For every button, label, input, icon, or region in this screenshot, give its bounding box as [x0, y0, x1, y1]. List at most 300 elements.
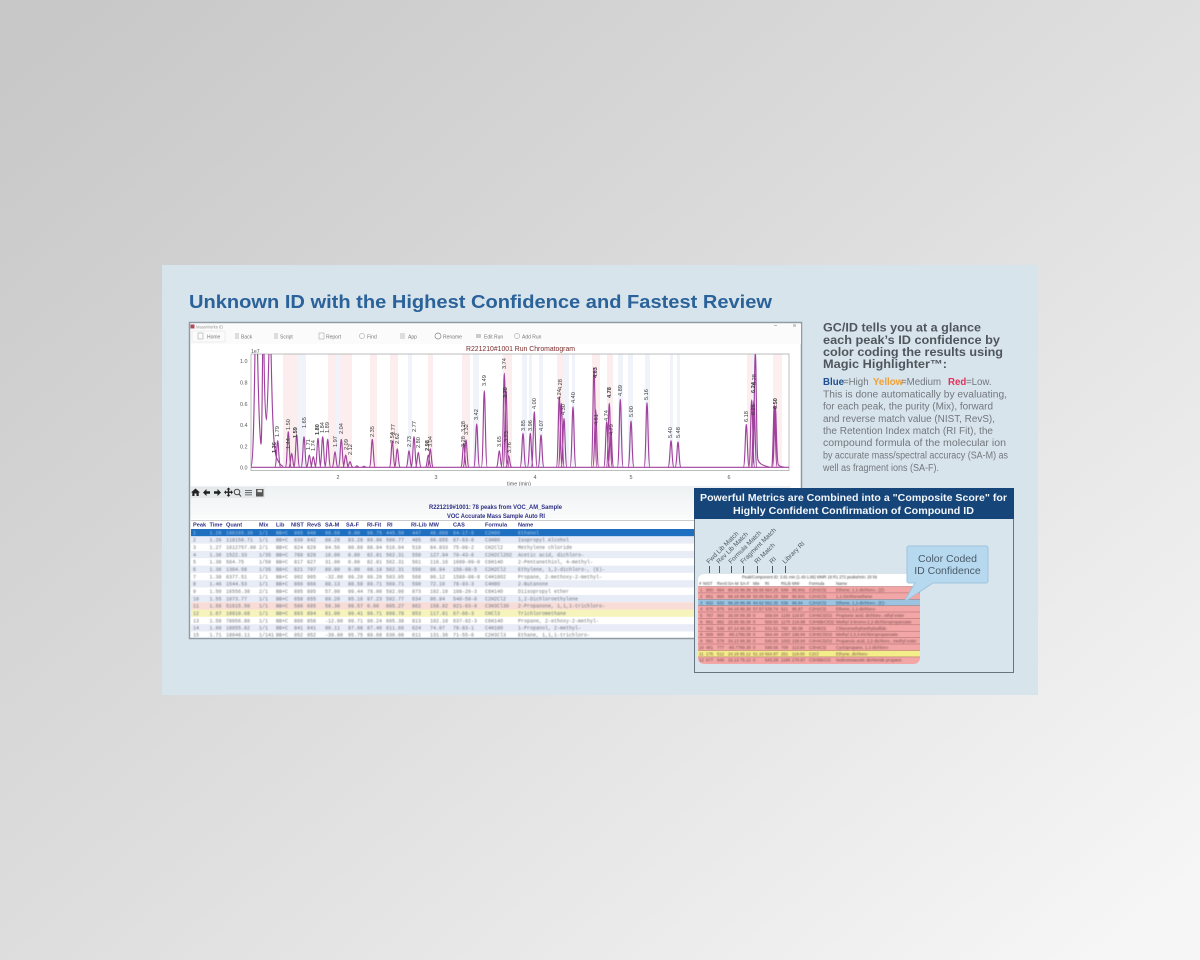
table rows: 921-03-9: [453, 604, 477, 610]
table rows: BB+C: [276, 626, 288, 632]
peak labels: 4.74: [604, 410, 610, 421]
mini results table: 1097: [781, 632, 791, 637]
mini results table: 549: [781, 588, 789, 592]
mini results table: 531.51: [765, 626, 779, 631]
mini results table: 932: [706, 600, 714, 605]
mini results table: 119.97: [792, 613, 805, 618]
mini results table: 34.13: [728, 639, 739, 644]
table rows: 13: [193, 618, 199, 624]
table rows: 592.77: [386, 596, 404, 602]
mini results table: 0: [753, 658, 756, 662]
table rows: 51615.50: [226, 604, 250, 610]
mini results table: 170.97: [792, 658, 806, 662]
mini results table: Ethene, 1,2-dichloro-, (E)-: [836, 600, 886, 605]
table rows: Diisopropyl ether: [518, 589, 569, 595]
table rows: 605.27: [386, 604, 404, 610]
software toolbar: MassWorks ID: [196, 324, 223, 330]
peak labels: 5.16: [644, 389, 650, 400]
mini results table: 777: [717, 645, 725, 650]
metric labels: Fragment Match: [739, 527, 778, 565]
mini results table: 540.00: [765, 639, 779, 644]
table rows: C2H3Cl3: [485, 632, 506, 638]
peak labels: 4.24: [557, 389, 563, 400]
table rows: 1073.77: [226, 596, 247, 602]
table rows: BB+C: [276, 618, 288, 624]
table rows: C4H10O2: [485, 574, 506, 580]
table rows: 590: [412, 582, 421, 588]
table rows: 1-Propanol, 2-methyl-: [518, 626, 581, 632]
table rows: 1.26: [210, 530, 222, 536]
x axis labels: time (min): [507, 482, 531, 488]
table rows: 1.50: [210, 589, 222, 595]
popup header: Highly Confident Confirmation of Compound ID: [733, 505, 974, 517]
table rows: 1/141: [259, 632, 274, 638]
table rows: 839: [294, 538, 303, 544]
table rows: 87.23: [367, 596, 382, 602]
mini results table: 99.18: [728, 594, 739, 599]
side body copy: compound formula of the molecular ion: [823, 438, 1006, 449]
mini results table: 851: [706, 594, 714, 599]
mini results table: 875: [717, 607, 725, 612]
table rows: 18055.82: [226, 626, 250, 632]
table header: Formula: [485, 522, 508, 528]
mini results table: Peak/Component ID: 3.81 min (1.40-1.86) MMR 18 R1 272 peaks/min: 20 hit: [742, 574, 878, 580]
mini results table: C4H6Cl2O2: [809, 613, 833, 618]
table rows: 31.00: [325, 560, 340, 566]
peak labels: 1.97: [333, 436, 339, 447]
table rows: 90.60: [348, 545, 363, 551]
table rows: 96.94: [430, 596, 445, 602]
side heading: color coding the results using: [823, 347, 1003, 359]
peak labels: 2.62: [395, 433, 401, 444]
mini results table: C3H5BrCl2: [809, 658, 831, 662]
peak labels: 4.61: [594, 414, 600, 425]
table rows: 1/35: [259, 552, 271, 558]
mini results table: 175: [706, 652, 714, 656]
mini results table: 569.04: [765, 613, 779, 618]
peak labels: 6.18: [744, 411, 750, 422]
mini results table: 97.14: [728, 626, 739, 631]
table header: CAS: [453, 522, 465, 528]
peak labels: 1.36: [272, 442, 278, 453]
mini results table: C5H8OS: [809, 626, 826, 631]
table rows: 68.19: [367, 567, 382, 573]
table rows: 89.20: [325, 596, 340, 602]
mini results table: 94.62: [753, 600, 764, 605]
table rows: 905: [307, 574, 316, 580]
table rows: 102.10: [430, 618, 448, 624]
x axis labels: 2: [336, 475, 340, 481]
table rows: 634: [412, 596, 421, 602]
mini results table: C2H2Cl2: [809, 600, 827, 605]
table header: SA-F: [346, 522, 360, 528]
mini results table: C2H2Cl2: [809, 607, 827, 612]
peak labels: 3.42: [474, 409, 480, 420]
mini results table: 85.08: [792, 626, 803, 631]
table rows: 2/1: [259, 589, 268, 595]
table rows: C4H8O: [485, 582, 500, 588]
table heading: [429, 504, 562, 520]
mini results table: 113.94: [792, 645, 805, 650]
table rows: 894: [307, 611, 316, 617]
table rows: 1/1: [259, 574, 268, 580]
table rows: 82.81: [367, 552, 382, 558]
table rows: 1304.58: [226, 567, 247, 573]
table rows: 99.71: [367, 611, 382, 617]
mini results table: C2Cl: [809, 652, 819, 656]
table rows: 89.68: [367, 632, 382, 638]
table rows: 893: [294, 611, 303, 617]
peak labels: 3.73: [504, 431, 510, 442]
table rows: 995: [294, 530, 303, 536]
table rows: 5: [193, 560, 196, 566]
mini results table: -85.77: [728, 645, 741, 650]
software toolbar: Find: [367, 334, 377, 340]
chart title: R221210#1001 Run Chromatogram: [466, 344, 575, 353]
table rows: 10: [193, 596, 199, 602]
table rows: -32.00: [325, 574, 343, 580]
mini results table: NIST: [703, 581, 713, 586]
peak labels: 2.98: [425, 440, 431, 451]
table rows: 1522.33: [226, 552, 247, 558]
peak labels: 6.26: [751, 404, 757, 415]
mini results table: 543.28: [765, 658, 779, 662]
peak labels: 1.74: [311, 440, 317, 451]
table rows: 88.13: [325, 582, 340, 588]
mini results table: 860: [706, 588, 714, 592]
chromatogram trace: [251, 350, 789, 467]
table rows: 500.77: [386, 538, 404, 544]
table rows: 1.46: [210, 582, 222, 588]
mini results table: 1002: [781, 639, 791, 644]
mini results table: 99.38: [740, 639, 751, 644]
table rows: C2H2Cl2: [485, 596, 506, 602]
mini results table: 1,1-Dichloroethene: [836, 594, 873, 599]
mini results table: 0: [753, 632, 756, 637]
table rows: 1.39: [210, 574, 222, 580]
mini results table: 119.00: [792, 652, 805, 656]
peak labels: 6.24: [751, 381, 757, 393]
peak labels: 1.50: [286, 419, 292, 430]
peak labels: 4.63: [593, 367, 599, 378]
mini results table: 96.941: [792, 594, 806, 599]
software toolbar: Rename: [443, 334, 462, 340]
popup header: Powerful Metrics are Combined into a "Composite Score" for: [700, 492, 1007, 504]
table rows: 2-Propanone, 1,1,1-trichloro-: [518, 604, 605, 610]
peak labels: 4.28: [558, 379, 564, 390]
mini results table: 99.38: [740, 588, 751, 592]
mini results table: #: [699, 581, 702, 586]
mini results table: 9: [700, 639, 703, 644]
table rows: 695: [307, 604, 316, 610]
side heading: [823, 322, 1003, 371]
mini results table: 8: [700, 632, 703, 637]
table rows: 789: [294, 552, 303, 558]
table rows: 866: [307, 582, 316, 588]
x axis labels: 3: [434, 475, 438, 481]
table rows: Isopropyl Alcohol: [518, 538, 569, 544]
table rows: 2: [193, 538, 196, 544]
mini results table: Chloromethylmethylsulfide: [836, 626, 887, 631]
table rows: 18048.11: [226, 632, 250, 638]
table header: Lib: [276, 522, 285, 528]
mini results table: 1190: [781, 613, 791, 618]
peak labels: 2.77: [412, 421, 418, 432]
table rows: 862: [412, 604, 421, 610]
table rows: BB+C: [276, 589, 288, 595]
mini results table: 99.38: [740, 619, 751, 624]
mini results table: Methyl 2,3,3-trichloropropanoate: [836, 632, 898, 637]
table rows: 485: [412, 538, 421, 544]
table rows: 445.50: [386, 530, 404, 536]
peak labels: 1.44: [286, 438, 292, 449]
table rows: 895: [307, 589, 316, 595]
mini results table: 56.66: [753, 588, 764, 592]
peak labels: 1.59: [293, 427, 299, 438]
mini results table: C3H5Cl3O2: [809, 632, 833, 637]
table rows: 16556.38: [226, 589, 250, 595]
mini results table: 564.44: [765, 632, 779, 637]
table rows: 564.75: [226, 560, 244, 566]
table rows: 99.44: [348, 589, 363, 595]
mini results table: C3H4Cl2: [809, 645, 827, 650]
software toolbar: Home: [207, 334, 221, 340]
peak labels: 5.00: [629, 406, 635, 417]
table rows: BB+C: [276, 611, 288, 617]
table rows: 87.46: [367, 626, 382, 632]
table rows: 96.94: [430, 567, 445, 573]
mini results table: 536: [781, 600, 789, 605]
peak labels: 1.84: [320, 422, 326, 433]
table rows: BB+C: [276, 632, 288, 638]
table rows: 64-17-5: [453, 530, 474, 536]
peak results table: [191, 520, 694, 638]
peak labels: 3.96: [528, 420, 534, 431]
table rows: 82.81: [367, 560, 382, 566]
peak labels: 3.74: [502, 358, 508, 369]
table rows: 858: [307, 618, 316, 624]
software toolbar: Report: [326, 334, 342, 340]
mini results table: 219.88: [792, 619, 806, 624]
table rows: [193, 530, 605, 638]
table rows: 87.08: [348, 626, 363, 632]
table rows: 1: [193, 530, 196, 536]
table heading: R221219#1001: 78 peaks from VOC_AM_Sample: [429, 504, 562, 511]
peak labels: 3.04: [428, 436, 434, 447]
table rows: BB+C: [276, 545, 288, 551]
table rows: 1/50: [259, 560, 271, 566]
peak labels: 4.07: [539, 420, 545, 431]
peak labels: 3.28: [461, 421, 467, 432]
table rows: 0.00: [348, 552, 360, 558]
table rows: 18910.68: [226, 611, 250, 617]
peak labels: 2.35: [370, 426, 376, 437]
table rows: 8: [193, 582, 196, 588]
table rows: 797: [307, 567, 316, 573]
table rows: 95.16: [348, 596, 363, 602]
table rows: BB+C: [276, 538, 288, 544]
table rows: 1589-08-8: [453, 574, 480, 580]
software toolbar: [190, 324, 801, 344]
mini results table: 539.74: [765, 607, 779, 612]
table rows: 89.71: [367, 582, 382, 588]
table header: RI-Lib: [411, 522, 427, 528]
mini results table: 564.25: [765, 588, 779, 592]
mini results table: 709: [781, 645, 789, 650]
metric labels: Rev Lib Match: [715, 531, 750, 565]
mini results table: 861: [706, 619, 714, 624]
mini results table: 99.28: [728, 600, 739, 605]
side heading: GC/ID tells you at a glance: [823, 322, 981, 334]
table rows: 131.30: [430, 632, 448, 638]
mini results table: -86.17: [728, 632, 741, 637]
y axis labels: 0.4: [240, 423, 248, 429]
mini results table: 26.00: [728, 613, 739, 618]
table rows: 6: [193, 567, 196, 573]
table rows: 952: [294, 632, 303, 638]
mini results table: 15.13: [728, 658, 739, 662]
table rows: BB+C: [276, 574, 288, 580]
mini results table: 99.38: [740, 632, 751, 637]
mini results table: 0: [753, 645, 756, 650]
table rows: 127.94: [430, 552, 448, 558]
table rows: 88.28: [325, 538, 340, 544]
mini results table: 261: [781, 652, 789, 656]
table rows: 550: [412, 552, 421, 558]
mini results table: 94.18: [728, 607, 739, 612]
mini results table: 85.12: [740, 652, 751, 656]
mini results table: Propanoic acid, 2,2-dichloro-, methyl ester: [836, 639, 917, 644]
table rows: 895: [294, 589, 303, 595]
mini results table: RILib: [781, 581, 791, 586]
table rows: 550: [412, 567, 421, 573]
table rows: CHCl3: [485, 611, 500, 617]
table rows: 158.92: [430, 604, 448, 610]
side body copy: and reverse match value (NIST, RevS),: [823, 414, 995, 425]
mini results table: Cyclopropane, 1,1-dichloro-: [836, 645, 889, 650]
peak labels: 1.89: [325, 422, 331, 433]
panel: composite score popup: [694, 488, 1014, 672]
table rows: 12: [193, 611, 199, 617]
side body copy: Red: [948, 377, 966, 388]
mini results table: 599.56: [765, 645, 779, 650]
mini results table: 0: [753, 619, 756, 624]
metric labels: Fwd Lib Match: [705, 530, 741, 565]
mini results table: 584: [781, 594, 789, 599]
peak labels: 3.76: [507, 442, 513, 453]
table rows: 609.78: [386, 611, 404, 617]
mini results table: C2H2Cl2: [809, 594, 827, 599]
side body copy: This is done automatically by evaluating,: [823, 390, 1007, 400]
table rows: 67-66-3: [453, 611, 474, 617]
mini results table: 25.95: [728, 619, 739, 624]
table rows: 1.36: [210, 567, 222, 573]
table rows: 1,2-Dichloroethylene: [518, 596, 578, 602]
table rows: 4: [193, 552, 196, 558]
peak labels: 4.79: [609, 424, 615, 435]
mini results table: 882: [717, 619, 725, 624]
table rows: C4H10O: [485, 626, 503, 632]
table header: Quant: [226, 522, 242, 528]
callout: color coded ID confidence: ID Confidence: [914, 565, 981, 577]
table rows: 562.31: [386, 560, 404, 566]
table rows: 2/1: [259, 545, 268, 551]
table header: MW: [429, 522, 440, 528]
metric labels: Formula Match: [727, 530, 763, 565]
mini results table: Propionic acid, dichloro-, ethyl ester: [836, 613, 905, 618]
mini results table: 750: [781, 626, 789, 631]
metric labels: Library RI: [781, 540, 806, 565]
table rows: 89.90: [367, 538, 382, 544]
table rows: 90.11: [325, 626, 340, 632]
mini results table: 99.38: [740, 626, 751, 631]
table header: NIST: [291, 522, 304, 528]
mini results table: 188.84: [792, 632, 806, 637]
mini results table: 512: [717, 652, 725, 656]
table rows: CH2Cl2: [485, 545, 503, 551]
mini results table: Mix: [753, 581, 760, 586]
peak labels: 1.65: [302, 417, 308, 428]
software toolbar: Add Run: [522, 334, 542, 340]
mini results table: 3: [700, 600, 703, 605]
peak labels: 1.79: [275, 426, 281, 437]
table rows: BB+C: [276, 604, 288, 610]
peak labels: 4.89: [618, 385, 624, 396]
y axis labels: 1.0: [240, 359, 248, 365]
mini results table: RI: [765, 581, 769, 586]
table rows: 0.00: [367, 604, 379, 610]
side text: description: [822, 322, 1008, 474]
mini results table: 51.10: [753, 652, 764, 656]
table rows: 873: [412, 589, 421, 595]
side body copy: =High: [843, 377, 869, 388]
table rows: BB+C: [276, 596, 288, 602]
mini results table: 89.38: [740, 607, 751, 612]
mini results table: 89.38: [740, 645, 751, 650]
mini results table: 50.00: [753, 594, 764, 599]
table rows: 78-83-1: [453, 626, 474, 632]
mini results table: 6: [700, 619, 703, 624]
table rows: 813: [412, 618, 421, 624]
table rows: 78-93-3: [453, 582, 474, 588]
mini results table: 662: [706, 626, 714, 631]
table rows: BB+C: [276, 560, 288, 566]
table rows: 94.56: [325, 545, 340, 551]
peak labels: 4.30: [561, 404, 567, 415]
mini results table: 548: [717, 626, 725, 631]
y axis labels: 1e7: [251, 349, 260, 355]
y axis labels: 0.0: [240, 466, 248, 472]
table rows: 853: [412, 611, 421, 617]
table rows: 74.07: [430, 626, 445, 632]
side body copy: Blue: [823, 377, 845, 388]
table rows: 16.00: [325, 552, 340, 558]
table rows: 569.71: [386, 582, 404, 588]
side body copy: for each peak, the purity (Mix), forward: [823, 402, 993, 412]
table rows: 57.00: [325, 589, 340, 595]
mini results table: 95.87: [792, 607, 803, 612]
table rows: 102.10: [430, 589, 448, 595]
peak labels: 1.71: [306, 439, 312, 450]
table rows: 14: [193, 626, 199, 632]
table rows: 561: [412, 560, 421, 566]
table rows: BB+C: [276, 582, 288, 588]
table rows: 1.26: [210, 538, 222, 544]
table header: Peak: [193, 522, 207, 528]
table rows: 1.36: [210, 552, 222, 558]
mini results table: SA-F: [740, 581, 750, 586]
table rows: 90.12: [430, 574, 445, 580]
